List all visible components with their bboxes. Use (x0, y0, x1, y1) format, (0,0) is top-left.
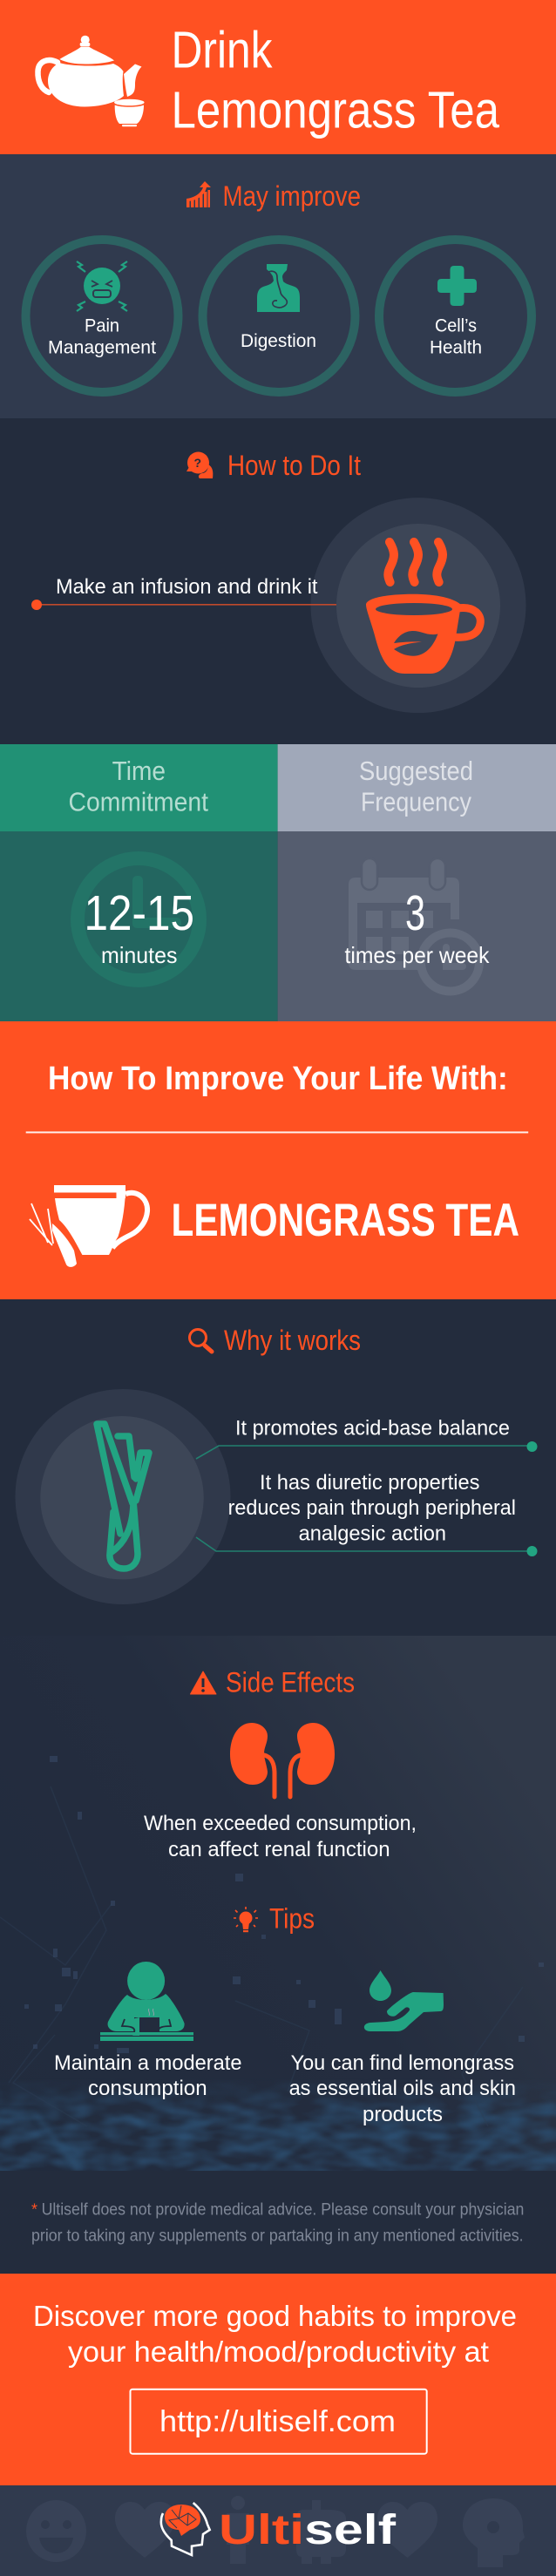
icon: cup with lemongrass (30, 1185, 147, 1267)
heading: may improve: May improve (223, 180, 361, 212)
heading: suggested frequency: Suggested (359, 756, 473, 786)
fact: diuretic and analgesic: analgesic action (299, 1522, 446, 1546)
panel: why it works (0, 1299, 556, 1636)
icon: digestive system (257, 264, 300, 312)
section: tips (54, 1903, 516, 2126)
text: disclaimer (31, 2201, 524, 2246)
step: make an infusion: Make an infusion and drink it (56, 575, 318, 599)
heading: tips: Tips (269, 1903, 315, 1935)
panel: how to improve your life (0, 1021, 556, 1299)
label: Management (48, 338, 156, 358)
title: Drink (171, 21, 273, 78)
text: discover more (33, 2300, 517, 2368)
value: 12-15 minutes (84, 885, 194, 968)
fact: diuretic and analgesic: It has diuretic properties (260, 1471, 479, 1495)
icon: light bulb (234, 1907, 258, 1932)
panel: footer (0, 2485, 556, 2576)
icon: magnifier (190, 1330, 212, 1352)
tip text: essential oils: You can find lemongrass (291, 2051, 514, 2075)
label (48, 316, 156, 358)
tip text: essential oils: products (363, 2103, 443, 2126)
value: 12-15 minutes: minutes (101, 942, 178, 968)
value: 3 times per week: times per week (345, 942, 490, 968)
icon: calendar watermark (349, 858, 479, 992)
title: Lemongrass Tea (171, 82, 499, 139)
tip text: moderate consumption (54, 2051, 242, 2100)
panel: how to do it (0, 418, 556, 744)
heading: how to do it (186, 450, 361, 481)
heading: time commitment: Commitment (68, 787, 208, 817)
heading: tips (234, 1903, 315, 1935)
wordmark: Ulti self (219, 2507, 397, 2553)
section: side effects (144, 1667, 417, 1861)
panel: side effects and tips background (0, 1636, 556, 2171)
text: discover more: Discover more good habits to improve (33, 2300, 517, 2332)
ring: digestion (202, 240, 356, 392)
text: disclaimer: Ultiself does not provide medical advice. Please consult your physician (42, 2201, 524, 2220)
logo: ultiself (161, 2503, 397, 2555)
heading: side effects: Side Effects (226, 1667, 355, 1698)
text: disclaimer: * (31, 2201, 37, 2219)
panel: header (0, 0, 556, 154)
value: 3 times per week: 3 (405, 885, 425, 941)
icon: question bubbles (186, 451, 213, 478)
panel: may improve (0, 154, 556, 418)
label: Health (430, 338, 482, 358)
footer watermark icons (26, 2496, 525, 2567)
panel: disclaimer (0, 2171, 556, 2274)
label: Digestion (241, 331, 316, 351)
heading: suggested frequency: Frequency (361, 787, 471, 817)
text: side effect description (144, 1812, 417, 1861)
icon: rising chart (186, 181, 211, 207)
tip text: essential oils: as essential oils and skin (289, 2077, 516, 2100)
value: 3 times per week (345, 885, 490, 968)
button: ultiself link (131, 2390, 427, 2454)
icon: warning triangle (190, 1671, 216, 1694)
icon: person with mug (100, 1962, 193, 2041)
panel: suggested frequency (278, 744, 556, 1021)
heading: suggested frequency (359, 756, 473, 817)
panel: time commitment (0, 744, 278, 1021)
icon: plus (437, 266, 477, 306)
heading: how to do it: How to Do It (227, 450, 361, 481)
icon: brain head (161, 2503, 210, 2555)
fact: acid-base balance (196, 1417, 537, 1459)
text: side effect description: can affect renal function (168, 1838, 390, 1861)
ring: cell's health (379, 240, 532, 392)
icon: steaming cup with leaf (310, 498, 526, 713)
fact: diuretic and analgesic (196, 1471, 537, 1556)
label: Pain (85, 316, 119, 336)
fact: diuretic and analgesic: reduces pain through peripheral (228, 1496, 516, 1520)
label (430, 316, 482, 358)
heading: why it works: Why it works (224, 1325, 361, 1356)
label: Cell’s (435, 316, 477, 336)
icon: kidneys (230, 1723, 335, 1797)
icon: lemongrass stalk (16, 1389, 230, 1604)
fact: acid-base balance: It promotes acid-base balance (235, 1417, 510, 1441)
button: ultiself link: http://ultiself.com (159, 2405, 396, 2438)
text: disclaimer: prior to taking any supplements or partaking in any mentioned activities. (31, 2227, 524, 2246)
title (171, 21, 499, 139)
text: side effect description: When exceeded consumption, (144, 1812, 417, 1835)
step: make an infusion (31, 575, 336, 610)
icon: drop over hand (364, 1970, 444, 2031)
value: 12-15 minutes: 12-15 (84, 885, 194, 941)
tip text: essential oils (289, 2051, 516, 2126)
tip text: moderate consumption: Maintain a moderate (54, 2051, 242, 2075)
icon: teapot and cup (37, 36, 145, 126)
tip text: moderate consumption: consumption (88, 2077, 207, 2100)
icon: question bubbles: ? (193, 456, 201, 470)
heading: time commitment (68, 756, 208, 817)
icon: clock watermark (78, 858, 200, 980)
panel: call to action (0, 2274, 556, 2485)
text: discover more: your health/mood/productivity at (68, 2335, 489, 2368)
icon: pain face (77, 261, 127, 311)
ring: pain management (26, 240, 178, 392)
heading: how to improve: How To Improve Your Life With: (48, 1061, 508, 1097)
heading: time commitment: Time (112, 756, 166, 786)
